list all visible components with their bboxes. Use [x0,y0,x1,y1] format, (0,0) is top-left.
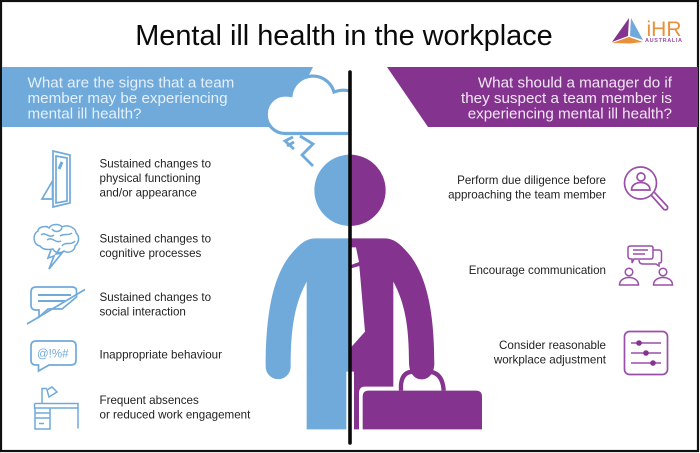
text: encourage communication: Encourage communication [469,264,606,277]
icon: swearing speech bubble [31,341,76,371]
icon: brain with lightning [34,224,79,269]
text: social interaction: Sustained changes to [100,291,211,304]
text: physical functioning: Sustained changes to [100,157,211,170]
figure: purple half with briefcase [350,155,482,429]
text: cognitive processes: Sustained changes to [100,232,211,245]
figure: blue half [266,155,350,429]
icon: two people talking [620,246,672,285]
icon: adjustment sliders [624,332,668,374]
heading: manager question: What should a manager do if [478,74,673,92]
text: social interaction: social interaction [100,306,186,319]
text: physical functioning: and/or appearance [100,187,197,200]
text: physical functioning: physical functioning [100,172,201,185]
icon: crossed out speech bubble [27,287,85,324]
logo: iHR Australia [612,18,682,44]
heading: manager question: they suspect a team member is [461,90,672,107]
icon: mirror [42,151,70,207]
figure: person split blue and purple [266,155,482,429]
text: absences: Frequent absences [100,394,199,407]
text: workplace adjustment: Consider reasonable [499,339,606,352]
heading: signs question: What are the signs that a team [28,74,234,92]
text: inappropriate behaviour: Inappropriate behaviour [100,348,222,361]
divider line [348,72,352,443]
logo: iHR Australia: iHR [646,18,682,41]
heading: signs question: member may be experiencing [28,90,228,107]
text: due diligence: Perform due diligence before [457,174,606,187]
text: due diligence: approaching the team member [448,188,606,202]
icon: storm cloud [266,76,350,166]
icon: swearing speech bubble: @!%# [37,348,69,360]
icon: magnifier with person [624,167,668,210]
text: workplace adjustment: workplace adjustment [493,354,607,366]
icon: desk with lamp [34,387,78,429]
heading: manager question: experiencing mental ill health? [468,106,672,122]
text: absences: or reduced work engagement [100,408,251,421]
title: Mental ill health in the workplace [135,20,553,52]
logo: iHR Australia: AUSTRALIA [645,38,682,44]
text: cognitive processes: cognitive processes [100,247,202,260]
heading: signs question: mental ill health? [28,106,141,122]
panel: signs banner [2,67,313,127]
panel: manager banner [387,67,698,127]
